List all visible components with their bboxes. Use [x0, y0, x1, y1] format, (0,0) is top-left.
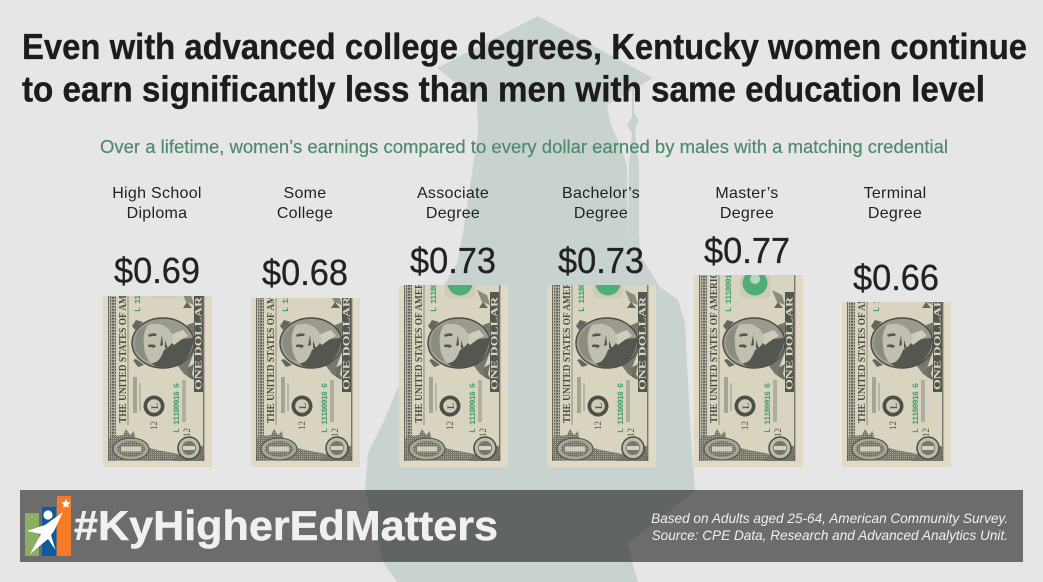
value: $0.73: [410, 240, 496, 281]
dollar bill: [103, 262, 212, 467]
dollar bill: ONE DOLLAR: [194, 296, 204, 390]
dollar bill: 12: [773, 428, 783, 437]
dollar bill: 12: [297, 421, 307, 430]
footer banner: [20, 490, 1023, 562]
graduate silhouette: [365, 16, 695, 582]
dollar bill: L 11180916 G: [430, 262, 439, 312]
dollar bill: L 11180916 G: [134, 262, 143, 312]
dollar bill: L: [150, 403, 160, 409]
icon: CPE logo: [25, 496, 71, 556]
dollar bill: 12: [478, 428, 488, 437]
value: $0.77: [704, 230, 790, 271]
dollar bill: ONE DOLLAR: [342, 296, 352, 390]
column: High School Diploma: [103, 185, 212, 467]
dollar bill: [547, 262, 656, 467]
subtitle: Over a lifetime, women’s earnings compared to every dollar earned by males with a matching credential: [100, 137, 948, 157]
dollar bill: L 11180916 G: [173, 383, 182, 433]
dollar bill: L 11180916 G: [617, 383, 626, 433]
label: Associate: [417, 185, 489, 202]
dollar bill: [694, 262, 803, 467]
label: Degree: [720, 205, 774, 222]
dollar bill: ONE DOLLAR: [490, 296, 500, 390]
dollar bill: 12: [445, 421, 455, 430]
label: College: [277, 205, 333, 222]
column: Bachelor's Degree: [547, 185, 656, 467]
source note: Source: CPE Data, Research and Advanced Analytics Unit.: [652, 528, 1008, 543]
dollar bill: 12: [182, 428, 192, 437]
column: Some College: [251, 185, 360, 467]
dollar bill: L: [594, 403, 604, 409]
source note: Based on Adults aged 25-64, American Community Survey.: [651, 511, 1008, 526]
label: Bachelor’s: [562, 185, 640, 202]
label: Degree: [868, 205, 922, 222]
dollar bill: L: [446, 403, 456, 409]
title: [22, 26, 1027, 110]
dollar bill: ONE DOLLAR: [638, 296, 648, 390]
label: Master’s: [715, 185, 779, 202]
dollar bill: L 11180916 G: [578, 262, 587, 312]
column: Master's Degree: [694, 185, 803, 467]
dollar bill: L 11180916 G: [321, 383, 330, 433]
dollar bill: L: [889, 403, 899, 409]
label: High School: [112, 185, 202, 202]
label: Degree: [574, 205, 628, 222]
dollar bill: 12: [740, 421, 750, 430]
dollar bill: 12: [593, 421, 603, 430]
banner background: [20, 490, 1023, 562]
dollar bill: L 11180916 G: [469, 383, 478, 433]
dollar bill: L 11180916 G: [764, 383, 773, 433]
dollar bill: 12: [888, 421, 898, 430]
dollar bill: L 11180916 G: [282, 262, 291, 312]
dollar bill: L 11180916 G: [725, 262, 734, 312]
dollar bill: L: [741, 403, 751, 409]
column: Terminal Degree: [842, 185, 951, 467]
dollar bill: [399, 262, 508, 467]
label: Terminal: [864, 185, 926, 202]
dollar bill: 12: [330, 428, 340, 437]
value: $0.66: [853, 257, 939, 298]
dollar bill: 12: [149, 421, 159, 430]
value: $0.68: [262, 252, 348, 293]
dollar bill: ONE DOLLAR: [932, 296, 942, 390]
hashtag: #KyHigherEdMatters: [74, 502, 498, 549]
label: Degree: [426, 205, 480, 222]
dollar bill: L 11180916 G: [912, 383, 921, 433]
dollar bill: 12: [921, 428, 931, 437]
column: Associate Degree: [399, 185, 508, 467]
dollar bill: ONE DOLLAR: [784, 296, 794, 390]
label: Some: [284, 185, 326, 202]
value: $0.73: [558, 240, 644, 281]
label: Diploma: [127, 205, 187, 222]
value: $0.69: [114, 250, 200, 291]
dollar bill: L: [298, 403, 308, 409]
dollar bill: [842, 262, 951, 467]
dollar bill: [251, 262, 360, 467]
dollar bill: L 11180916 G: [873, 262, 882, 312]
dollar bill: 12: [626, 428, 636, 437]
